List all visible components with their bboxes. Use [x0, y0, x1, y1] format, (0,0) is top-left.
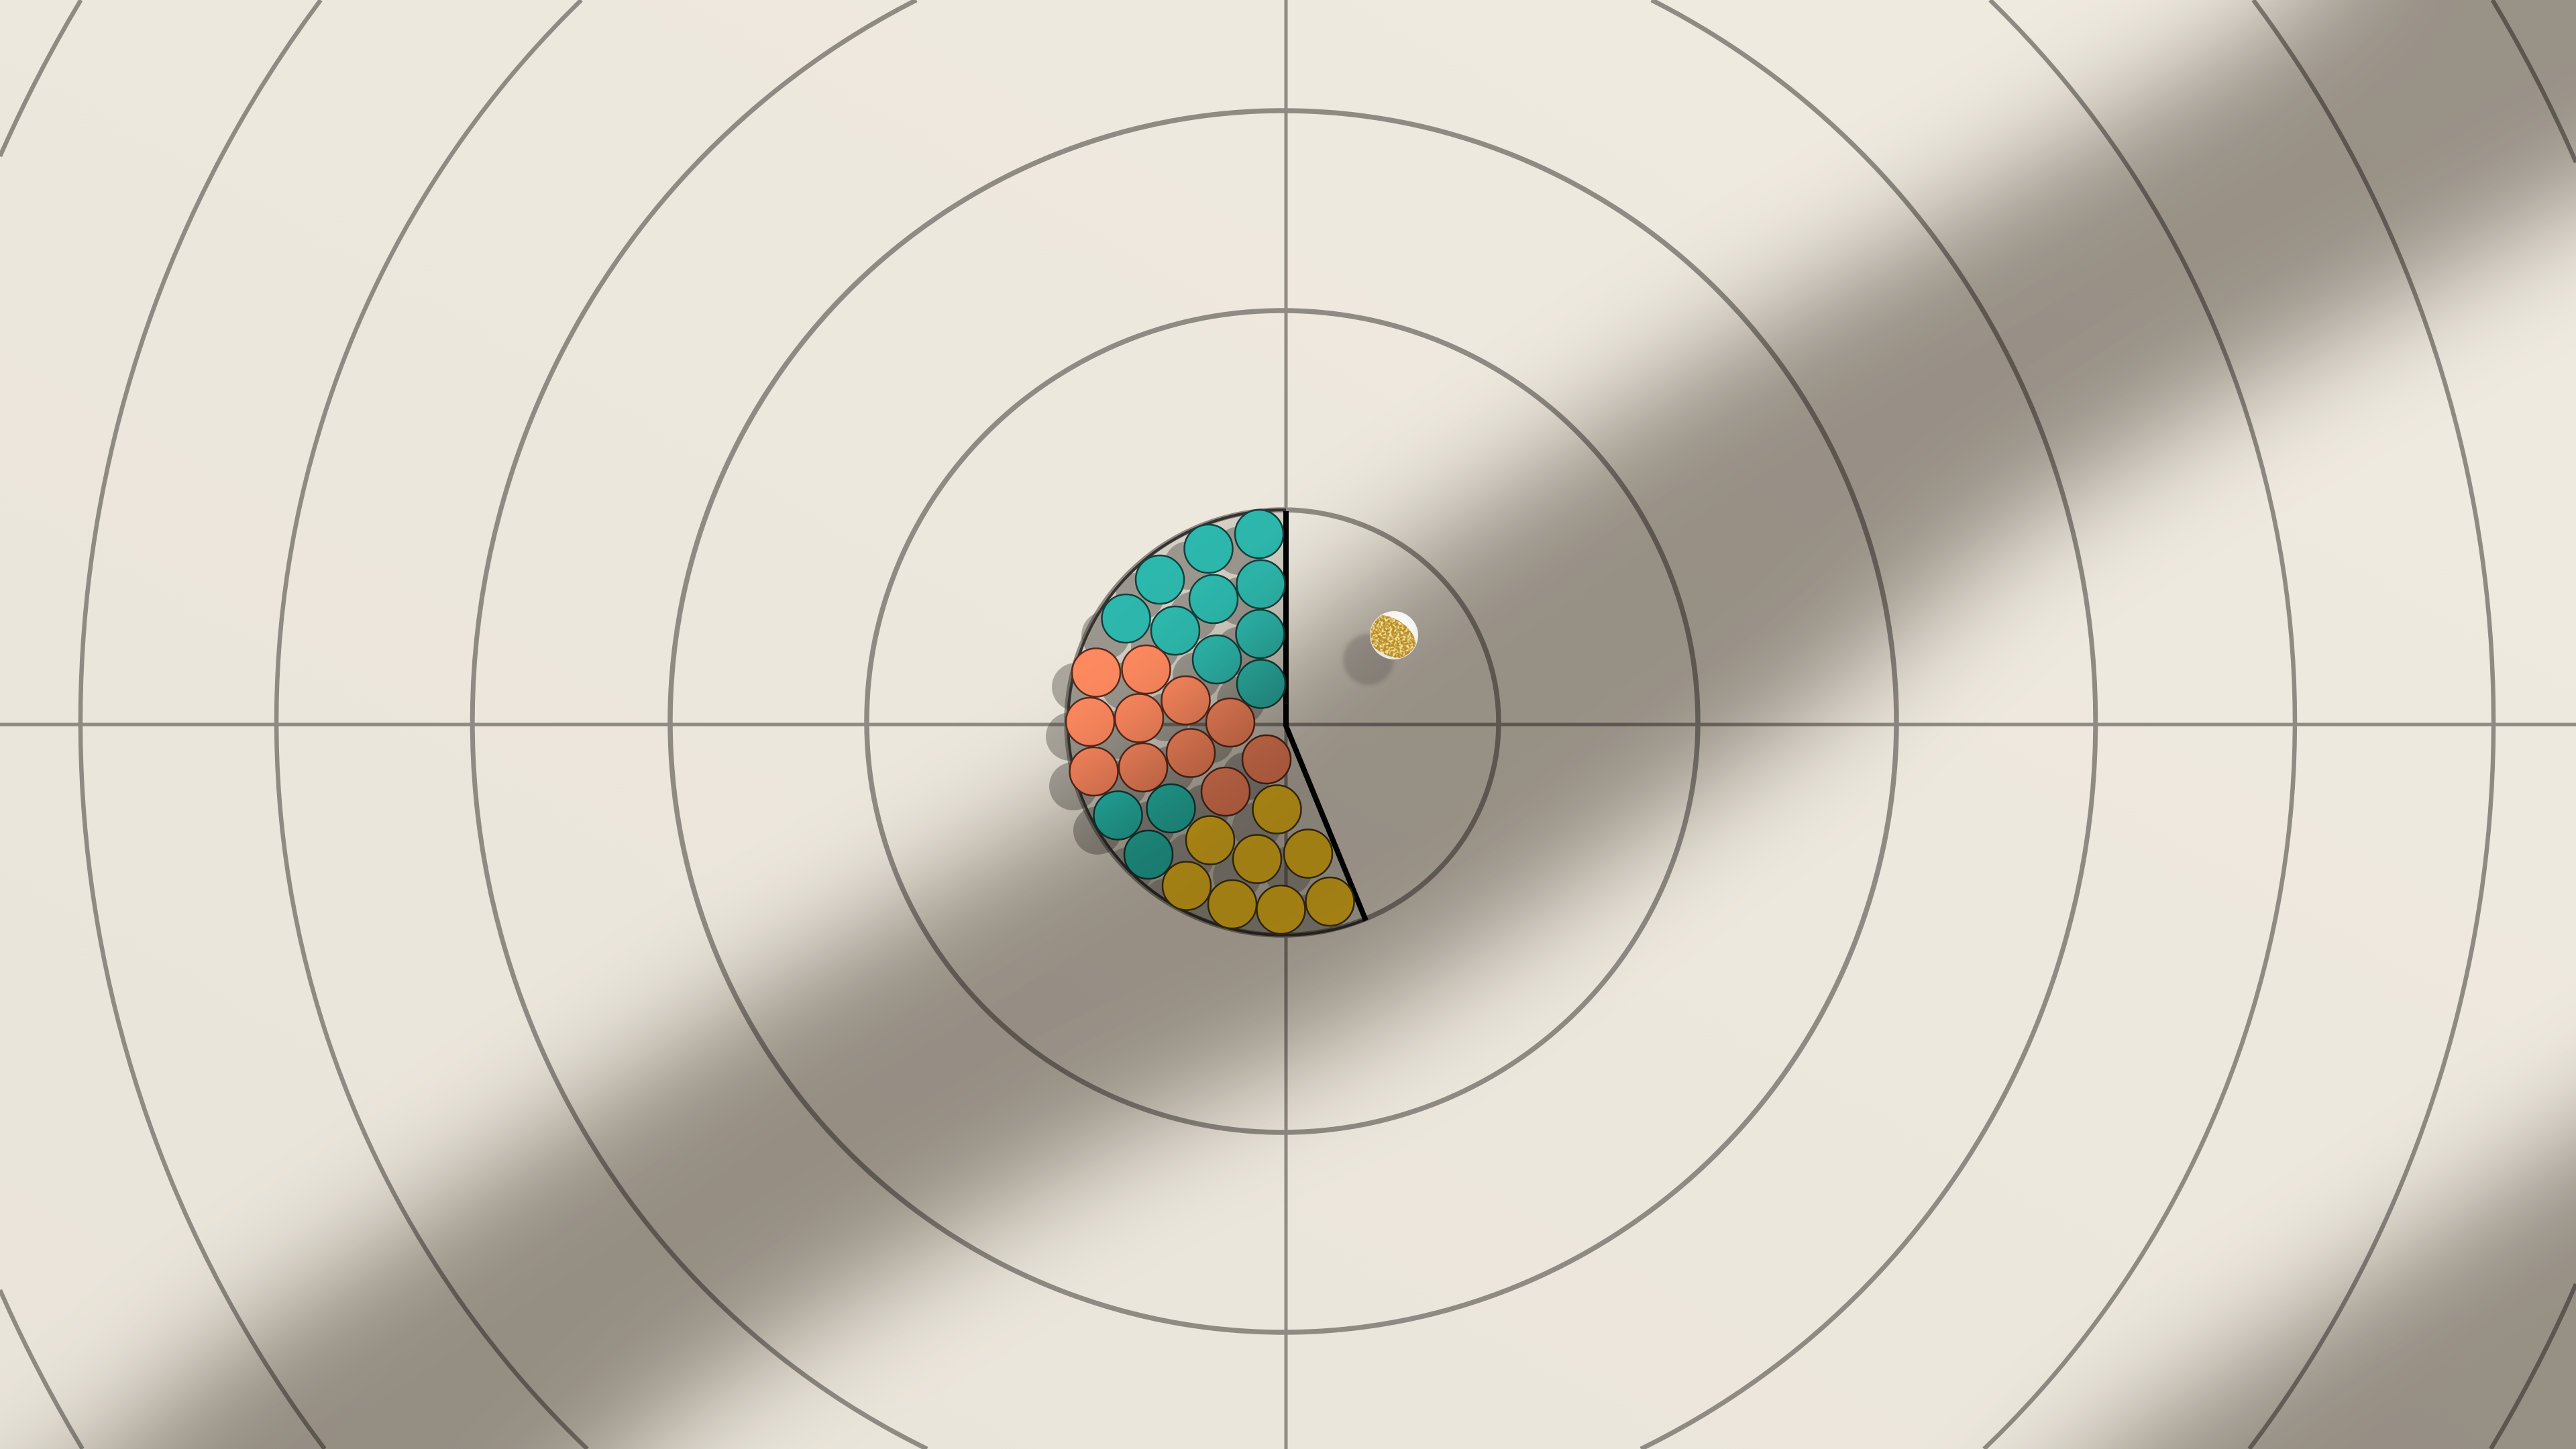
marble glitter [1356, 606, 1424, 667]
wedge-clipped coin shadows [1114, 802, 1332, 934]
vertical axis [1284, 0, 1288, 1449]
pie wedge base [1068, 510, 1366, 935]
marble gold base [1356, 606, 1424, 667]
coins: teal group [1102, 510, 1285, 708]
wedge straight edges [1286, 511, 1366, 920]
coins: gold group [1163, 785, 1354, 934]
coins: dark teal group [1093, 784, 1195, 879]
horizontal axis [0, 723, 2576, 726]
gold glitter marble [1370, 611, 1418, 659]
marble body [1370, 611, 1418, 659]
wedge arc [1068, 510, 1366, 935]
marble shadow [1343, 634, 1394, 685]
pie wedge outline [1068, 510, 1366, 935]
coins: coral group [1066, 645, 1291, 816]
coin shadows [1046, 527, 1271, 855]
